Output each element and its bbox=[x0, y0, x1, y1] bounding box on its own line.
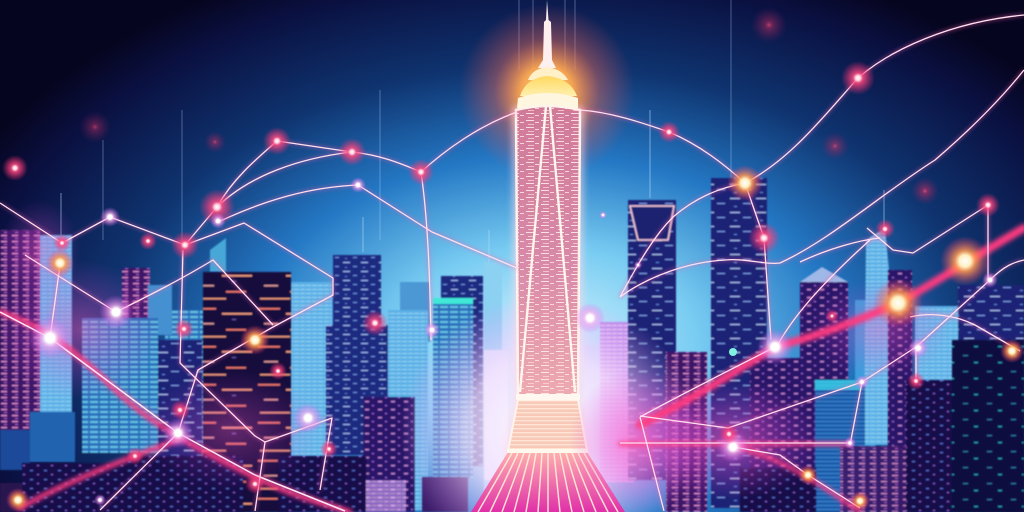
left mid buildings bbox=[0, 230, 483, 512]
thick pink ribbons bbox=[0, 228, 1024, 512]
right mid buildings bbox=[628, 178, 1024, 512]
landmark tower bbox=[471, 0, 625, 512]
tower shaft bbox=[516, 106, 580, 397]
tower lower collar bbox=[508, 400, 587, 451]
dim background light dots bbox=[2, 7, 939, 250]
tower inner braces bbox=[520, 106, 575, 392]
foreground buildings bbox=[0, 456, 816, 512]
tower dome bbox=[517, 67, 578, 108]
tower spire bbox=[538, 0, 556, 68]
tower flared base bbox=[471, 452, 625, 512]
glow behind tower base bbox=[400, 295, 696, 512]
thin vertical light lines bbox=[61, 0, 884, 300]
bloom around tower shaft bbox=[508, 110, 587, 451]
glow around tower crown bbox=[459, 4, 635, 180]
pink glow washes bbox=[0, 200, 950, 512]
back layer buildings bbox=[30, 228, 1024, 512]
